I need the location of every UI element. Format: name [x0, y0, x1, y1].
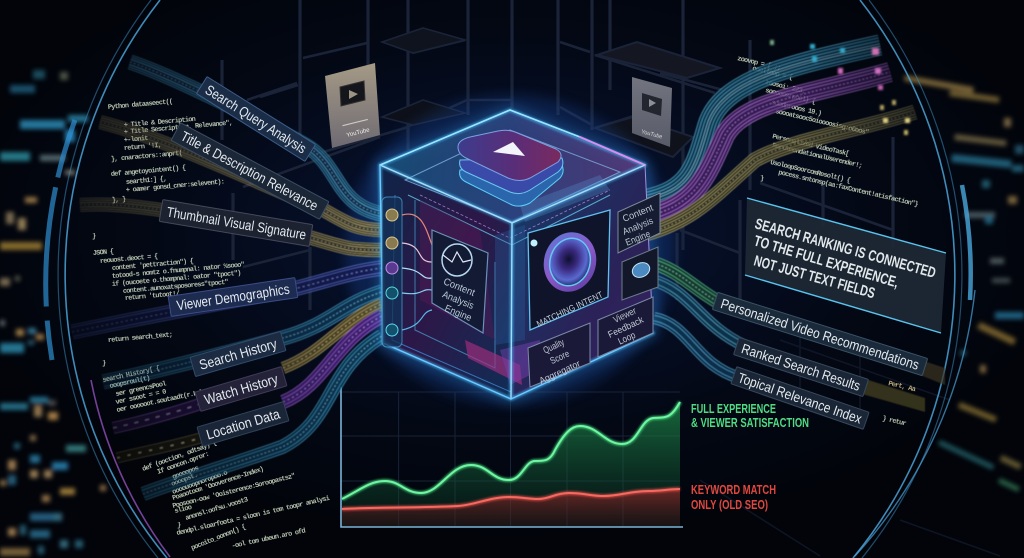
label: watch history: Watch History: [202, 371, 280, 407]
stream: lower blue: [143, 336, 382, 494]
green area: [342, 402, 680, 527]
code block left: pocoito_oonon() {: [190, 523, 247, 553]
code block right: [736, 55, 919, 428]
panel: viewer feedback loop: Loop: [616, 330, 637, 348]
stream: top gold: [645, 112, 915, 234]
stream: top blue: [645, 45, 880, 200]
code block right: soooatsooc5oioooosisg:o0oos": [774, 108, 869, 137]
code block right: } retur: [881, 415, 907, 428]
stream: search query: [130, 62, 382, 214]
label: thumbnail visual signature: Thumbnail Visual Signature: [166, 204, 308, 243]
chart label: keyword match: ONLY (OLD SEO): [691, 497, 768, 512]
plaque: right: YouTube: [640, 129, 663, 141]
code block right: sooooosrpoel) {: [764, 87, 816, 107]
panel: viewer feedback loop: Feedback: [606, 315, 646, 341]
code block right: Personalized VideoTask[: [771, 133, 850, 159]
code block left: if (oucoete o.thompnal: oator "tpoct"): [112, 270, 242, 289]
label: viewer demographics: Viewer Demographics: [175, 281, 291, 313]
stream: top purple: [645, 72, 890, 217]
code block right: pocess.sntonsp(aa:faxContent!atisfaction"}: [777, 169, 919, 209]
panel: viewer feedback loop: [598, 297, 653, 357]
code block left: goooopos: [171, 465, 200, 482]
stream: ranked: [656, 275, 746, 348]
code block left: + oamer gonsd_cner:selevent):: [126, 178, 225, 195]
code block right: soodprooos 19.): [770, 99, 822, 119]
panel: matching intent: MATCHING INTENT: [535, 289, 605, 329]
code block left: ver ssoot = = 0: [115, 388, 167, 407]
label: ranked search results: Ranked Search Results: [740, 340, 862, 394]
code block right: zoovop = { ;;: [736, 55, 781, 73]
cube: right face: [511, 165, 653, 399]
plaque: left: YouTube: [346, 127, 371, 139]
panel: viewer feedback loop: Viewer: [612, 306, 638, 326]
code block right: Pert, Aa: [887, 380, 917, 394]
code block left: ooopsroul(t): [109, 375, 151, 391]
chart label: full experience: & VIEWER SATISFACTION: [691, 415, 809, 430]
cube: glowing edges: [380, 110, 653, 399]
panel: content analysis engine right: Content: [621, 202, 655, 225]
stream: watch history: [113, 304, 382, 428]
code block right: ooolloop = {: [751, 65, 793, 82]
stream: thumbnail: [80, 204, 382, 250]
code block left: anonsl:oofsu.voost3: [185, 496, 249, 523]
code block left: content.aunoxatsposoress"tpoct": [123, 279, 229, 296]
cube: left face: [380, 165, 512, 399]
code block left: oooouoopnoropoo.o: [171, 469, 229, 497]
code block left: }: [102, 360, 106, 368]
code block left: + Title Sescription, Relevance",: [124, 120, 233, 137]
stream: title and description: [100, 122, 382, 230]
code block left: Poosoon-oow 'Ooisterence:Soroopastsz": [172, 473, 296, 511]
stream tails right: [862, 358, 945, 412]
shelves with plaques: [222, 0, 1000, 556]
center glow: [345, 95, 675, 405]
code block left: Poaootoom 'Oooverence-Index): [171, 466, 265, 503]
label: search query analysis: Search Query Analysis: [203, 81, 309, 157]
panel: quality score aggregator: Score: [549, 349, 571, 367]
code block left: oer oooooot.soutaadt(r.Loboositer3z2a3tt): [116, 378, 255, 415]
code block left: JSON {: [93, 248, 114, 258]
wires: [402, 214, 432, 330]
code block right: UsoloopSoorcomResolt() {: [769, 159, 851, 185]
code block right: }: [760, 175, 764, 183]
code block left: return 'tutoot!/: [125, 290, 180, 303]
code block left: If ooncon.opror:: [156, 451, 210, 477]
red area: [342, 489, 680, 527]
code block left: + Title & Description: [124, 116, 196, 130]
green line: [342, 402, 680, 499]
panel: content analysis engine right: [618, 193, 660, 253]
bokeh data right: [904, 75, 1024, 492]
code block left: searth1:] {,: [126, 175, 167, 187]
axes: [341, 387, 683, 527]
code block right: toosoi: 223,: [764, 79, 806, 96]
label: personalized video recommendations: Personalized Video Recommendations: [719, 295, 921, 373]
code block left: ser greencsPool: [115, 380, 167, 399]
plaque: right: [632, 77, 672, 147]
stream: search history: [103, 292, 382, 382]
code block left: search History[ {: [102, 365, 161, 385]
panel: small icon: [622, 247, 658, 300]
chart label: keyword match: KEYWORD MATCH: [691, 482, 776, 497]
stream: topical: [654, 312, 736, 382]
chart label: keyword match: [691, 482, 776, 512]
panel: content analysis engine left: [432, 230, 488, 333]
cube: top face: [380, 110, 645, 223]
callout: search ranking statement: TO THE FULL EXPERIENCE,: [752, 233, 901, 291]
callout: search ranking statement: SEARCH RANKING IS CONNECTED: [753, 215, 938, 282]
panel: connector rail: [382, 197, 402, 347]
panel: content analysis engine right: Engine: [624, 229, 652, 249]
code block left: }, cnaractors::anprt(: [111, 150, 183, 164]
panel: matching intent: [528, 210, 610, 330]
line chart: [341, 387, 683, 527]
code block left: def (ooction, odtsay) {: [141, 439, 218, 474]
panel: content analysis engine left: Analysis: [441, 289, 475, 312]
panel: quality score aggregator: Aggregator: [538, 358, 582, 387]
panel: quality score aggregator: [528, 323, 590, 387]
icon: play button block: [458, 130, 563, 206]
label: topical relevance index: Topical Relevance Index: [736, 369, 864, 427]
code block left: }: [92, 233, 96, 241]
code block left: }: [177, 522, 181, 530]
cube: inner detail: [392, 130, 620, 392]
data streams left: [72, 62, 382, 494]
floating data pixels top right: [770, 40, 910, 135]
code block left: +-lonit: [124, 135, 149, 145]
callout: search ranking statement: [745, 198, 946, 333]
code block left: dendpl.sloarfoota = sloon is tom toopr analysi: [176, 495, 331, 538]
stream: viewer demographics: [72, 268, 382, 332]
panel: content analysis engine right: Analysis: [621, 216, 655, 238]
code block right: RecommendationalUserender!;: [771, 142, 863, 171]
code block left: totood-s nomtz o.fnumpnal: nator %sooo": [112, 261, 245, 281]
stream: location data: [117, 316, 382, 458]
code block left: oooopst.: [170, 472, 199, 489]
label: title and description relevance: Title & Description Relevance: [178, 128, 321, 214]
central cube: [380, 110, 660, 399]
plaque: left: [325, 63, 380, 148]
label: location data: Location Data: [204, 405, 282, 442]
code block left: return '!I,: [124, 142, 162, 153]
code block left: reouost.deoct = {: [100, 253, 158, 266]
panel: content analysis engine left: Content: [442, 276, 476, 299]
code block left: def angetoyointent() {: [111, 164, 186, 179]
data streams right: [645, 45, 920, 420]
stream: personalized: [658, 256, 718, 308]
callout: search ranking statement: NOT JUST TEXT FIELDS: [752, 252, 877, 302]
code block left: slioo: [174, 504, 193, 516]
bokeh data left: [0, 70, 106, 556]
label: search history: Search History: [197, 335, 279, 373]
code block left: return search_text;: [108, 331, 173, 345]
code block left: -ool tom ubeun.aro ofd: [231, 527, 306, 551]
code block left: Python dataaseect((: [108, 98, 173, 112]
code block left: }, }: [112, 196, 126, 205]
icon: camera lens: [537, 226, 603, 298]
code block left: content 'pettraction") {: [112, 258, 194, 273]
cube: outer glow: [380, 110, 653, 399]
code block left: [92, 98, 331, 553]
panel: content analysis engine left: Engine: [443, 303, 473, 324]
chart label: full experience: FULL EXPERIENCE: [691, 401, 776, 416]
panel: quality score aggregator: Quality: [542, 337, 566, 356]
red line: [342, 489, 680, 509]
chart label: full experience: [691, 401, 809, 430]
